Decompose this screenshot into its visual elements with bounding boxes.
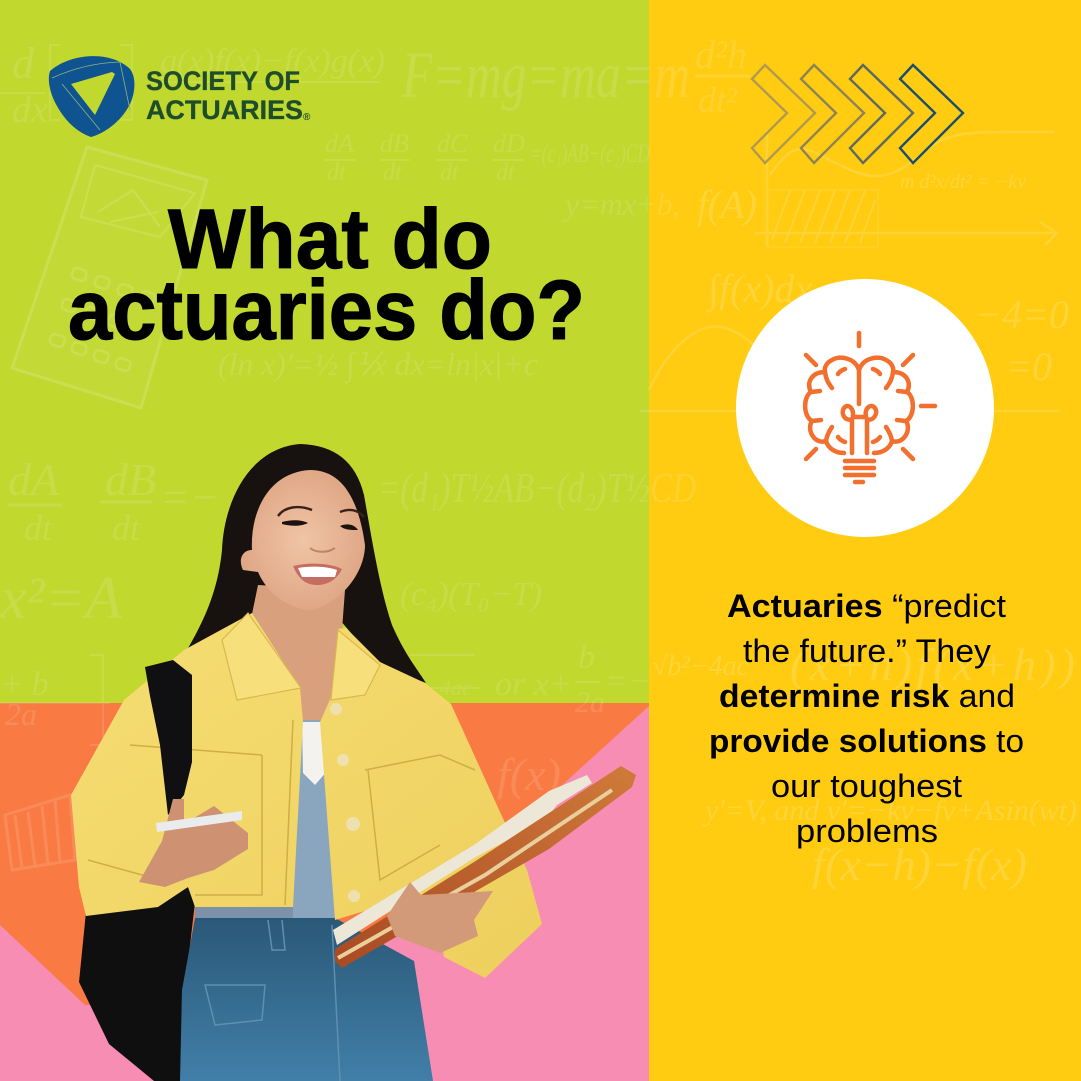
photo: student with folder xyxy=(71,444,636,1081)
background: math formulas on green: 2a xyxy=(5,696,37,732)
background: math formulas on yellow: f(x−h)−f(x) xyxy=(812,839,1027,890)
text block: description xyxy=(709,588,1024,849)
jeans details xyxy=(205,920,340,1081)
background: math formulas on yellow: f(A) xyxy=(697,182,757,227)
jacket seams xyxy=(88,720,475,905)
background: math formulas on green: x²=A xyxy=(0,565,122,631)
nose xyxy=(310,548,335,552)
panel: pink geometric shapes xyxy=(0,706,649,1081)
pen xyxy=(156,811,242,832)
top: blue vest xyxy=(292,720,335,918)
text block: description: problems xyxy=(796,813,938,849)
backpack xyxy=(79,885,197,1081)
icon: faint calculator xyxy=(12,147,207,408)
background: math formulas on green: (ln x)′=½ ∫⅟x dx=ln|x|+c xyxy=(218,346,538,384)
text block: description: determine risk and xyxy=(719,678,1015,714)
background: math formulas on yellow: y′=V, and v′=−kv−fv+Asin(wt) xyxy=(702,794,1077,827)
hair xyxy=(184,444,426,683)
logo wordmark: SOCIETY OF xyxy=(146,66,300,96)
background: math formulas on green: =− xyxy=(605,663,651,700)
background: math formulas on green: dt xyxy=(440,160,460,186)
text block: description: Actuaries “predict xyxy=(727,588,1006,624)
panel: yellow background xyxy=(649,0,1081,1081)
jacket xyxy=(71,613,542,978)
background: math formulas on green: dB xyxy=(105,454,156,505)
background: math formulas on green: dC xyxy=(437,129,468,158)
left hand xyxy=(139,799,248,887)
buttons xyxy=(330,703,360,902)
background: math formulas on green: dB xyxy=(380,129,409,158)
icon: brain light bulb xyxy=(805,333,935,482)
background: math formulas on yellow: −4=0 xyxy=(975,292,1069,337)
panel: white circle xyxy=(736,279,994,537)
text block: description: provide solutions to xyxy=(709,723,1024,759)
text block: description: the future.” They xyxy=(743,633,991,669)
background: math formulas on green: 2a xyxy=(575,686,605,719)
strap xyxy=(145,660,192,815)
title: What do xyxy=(168,192,492,286)
waistband xyxy=(195,905,293,918)
logo wordmark: ® xyxy=(303,112,311,123)
text block: description: our toughest xyxy=(771,768,962,804)
background: math formulas on green: or x+ xyxy=(495,666,572,703)
logo wordmark: ACTUARIES xyxy=(146,95,303,125)
arrows: four chevrons xyxy=(752,65,963,163)
right hand xyxy=(387,882,493,953)
background: math formulas on green: =− xyxy=(160,473,219,522)
background: math formulas on green: y=mx+b, xyxy=(562,186,680,222)
background: math formulas on green: 4ac xyxy=(440,675,472,700)
folder stripe xyxy=(338,790,612,958)
panel: green background xyxy=(0,0,649,703)
background: math formulas on green: + b xyxy=(0,666,48,703)
folder sleeve xyxy=(335,766,636,968)
icon: shield xyxy=(49,56,134,137)
background: math formulas on yellow: m d²x/dt² = −kv xyxy=(900,171,1026,193)
background: math formulas on green: g(x)f(x)−f(x)g(x) xyxy=(160,43,385,80)
background: math formulas on green: dt xyxy=(327,160,347,186)
jeans xyxy=(180,918,433,1081)
background: math formulas on green: =(d₁)T½AB−(d₂)T½CD xyxy=(378,466,696,512)
panel: orange background xyxy=(0,703,649,1081)
top: white shirt xyxy=(302,722,328,785)
background: math formulas on green: d xyxy=(12,39,35,88)
background: math formulas on green: b xyxy=(578,639,595,676)
background: math graph on yellow xyxy=(640,130,1060,411)
background: math formulas on green: dx xyxy=(12,89,48,131)
jacket collars xyxy=(222,613,380,700)
background: math formulas on yellow: (x+h)f(x+h)) xyxy=(790,639,1075,690)
background: math formulas on green: dt xyxy=(383,160,403,186)
background: math formulas on green: dt xyxy=(24,508,53,548)
background: math formulas on yellow: ∫f(x)dx xyxy=(705,266,812,313)
background: math formulas on green: dt xyxy=(112,508,141,548)
background: math formulas on green: d²h xyxy=(695,32,747,77)
eyes and brows xyxy=(278,507,364,517)
background: math formulas on yellow xyxy=(652,171,1077,890)
background: math formulas on green xyxy=(0,32,750,870)
background: math formulas on green: dt xyxy=(496,160,516,186)
title: actuaries do? xyxy=(68,263,585,357)
face xyxy=(241,470,365,610)
background: math formulas on green: dD xyxy=(493,129,525,158)
background: math formulas on green: dA xyxy=(325,129,354,158)
background: math formulas on yellow: =0 xyxy=(1005,344,1052,389)
logo wordmark xyxy=(146,66,311,125)
background: math formulas on green: dA xyxy=(8,454,60,505)
background: math formulas on green: dt² xyxy=(698,80,738,120)
background: math formulas on yellow: √b²−4ac xyxy=(652,651,750,682)
folder pages xyxy=(333,775,592,945)
mouth xyxy=(293,564,342,585)
background: math formulas on green: =(c₁)AB−(c₂)CD xyxy=(530,139,650,168)
logo: Society of Actuaries xyxy=(49,56,311,137)
background: math formulas on green: F=mg=ma=m xyxy=(401,39,690,112)
neck xyxy=(252,585,345,724)
background: math formulas on green: (c₄)(T₀−T) xyxy=(400,576,542,613)
background: math formulas on green: f(x) xyxy=(497,749,561,800)
title xyxy=(68,192,585,357)
